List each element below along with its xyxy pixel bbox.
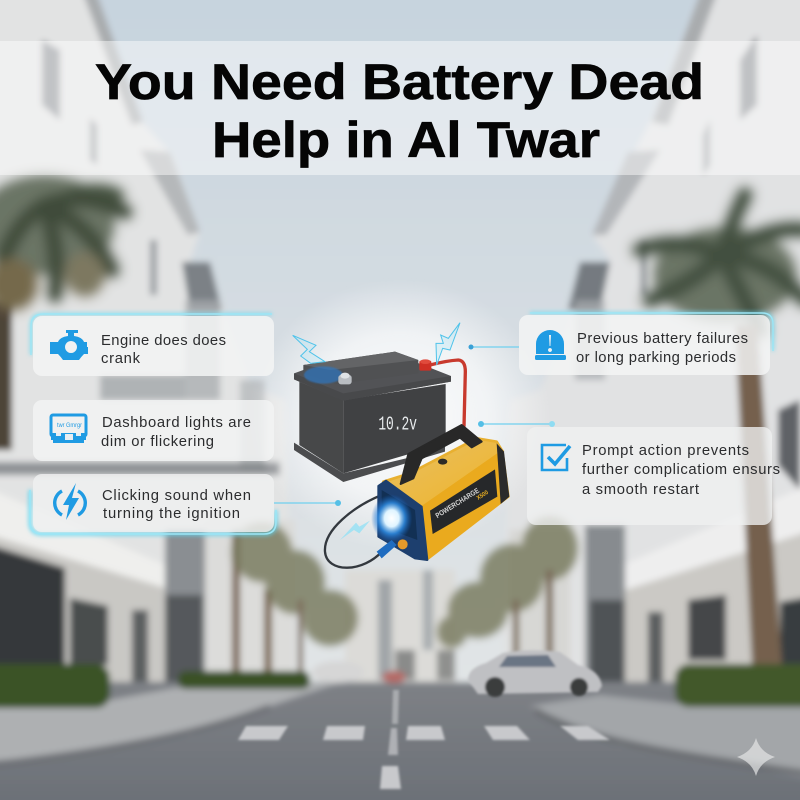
car: [468, 650, 602, 697]
handle button: [438, 459, 447, 465]
battery raised lid: [303, 352, 418, 384]
distant building: [345, 570, 455, 685]
right buildings: [500, 0, 800, 700]
icon: power bolt: [55, 483, 85, 520]
dark side edge: [497, 443, 509, 504]
text: prompt action: Prompt action prevents: [582, 443, 749, 459]
brand text: POWERCHARGE: [434, 486, 481, 520]
panel: prompt action: [527, 427, 780, 525]
right ground floor: [622, 520, 800, 695]
lightning on cable: [340, 521, 370, 540]
icon: dashboard: [51, 415, 86, 443]
text: clicking: Clicking sound when: [102, 488, 251, 504]
battery left face: [299, 382, 343, 473]
road markings: [238, 690, 610, 789]
palms far: [232, 516, 578, 648]
lightning: right: [436, 323, 460, 365]
text: dashboard: dim or flickering: [101, 434, 214, 450]
red cable: [430, 360, 465, 427]
yellow top: [383, 438, 503, 507]
positive terminal: [419, 359, 431, 371]
hedges: [0, 664, 110, 708]
plug: [377, 540, 397, 558]
icon: alert beacon: [535, 330, 566, 360]
blue glow on negative terminal: [304, 366, 343, 384]
blue front panel: [378, 481, 427, 560]
text: engine: crank: [101, 351, 141, 367]
spark on panel: [371, 494, 412, 542]
handle: [401, 425, 482, 484]
panel: engine does not crank: [31, 314, 274, 376]
voltage readout: 10.2v: [378, 413, 417, 435]
title: Help in Al Twar: [212, 112, 600, 168]
battery front face: [343, 384, 446, 473]
text: previous failures: Previous battery failures: [577, 331, 748, 347]
lightning: left: [293, 335, 325, 363]
text: previous failures: [576, 331, 748, 366]
battery: [293, 323, 465, 482]
left palm: [0, 175, 125, 311]
icon: checkbox: [542, 445, 570, 470]
title: You Need Battery Dead: [95, 54, 704, 110]
left buildings: [0, 0, 295, 700]
panel: clicking sound: [30, 474, 276, 534]
screen: [382, 490, 417, 540]
icon: dashboard: twr Gmrgr: [57, 423, 82, 429]
text: dashboard: [101, 415, 251, 450]
black label: [430, 469, 497, 534]
battery base: [294, 443, 445, 482]
connector lines: [274, 344, 555, 506]
central white halo: [250, 280, 550, 550]
model badge: X500: [476, 490, 490, 502]
panel: previous failures: [519, 313, 773, 375]
yellow side: [422, 451, 509, 560]
cable: [325, 495, 383, 568]
text: clicking: [102, 488, 251, 522]
text: previous failures: or long parking periods: [576, 350, 736, 366]
right palm: [640, 195, 800, 330]
text: engine: Engine does does: [101, 333, 226, 349]
text: prompt action: [582, 443, 780, 498]
title banner: [0, 41, 800, 175]
street: [0, 682, 800, 800]
negative terminal: [338, 373, 352, 384]
icon: engine: [50, 330, 88, 360]
orange knob: [398, 539, 408, 549]
text: dashboard: Dashboard lights are: [102, 415, 251, 431]
title: [95, 54, 704, 168]
text: prompt action: a smooth restart: [582, 482, 699, 498]
left ground floor: [0, 520, 170, 700]
panel: dashboard lights: [33, 400, 274, 461]
battery top plate: [294, 353, 451, 401]
icon: sparkle watermark: [737, 738, 775, 776]
text: engine: [101, 333, 226, 367]
portable jump starter: [325, 425, 509, 568]
text: clicking: turning the ignition: [103, 506, 240, 522]
text: prompt action: further complicatiom ensurs: [582, 462, 780, 478]
